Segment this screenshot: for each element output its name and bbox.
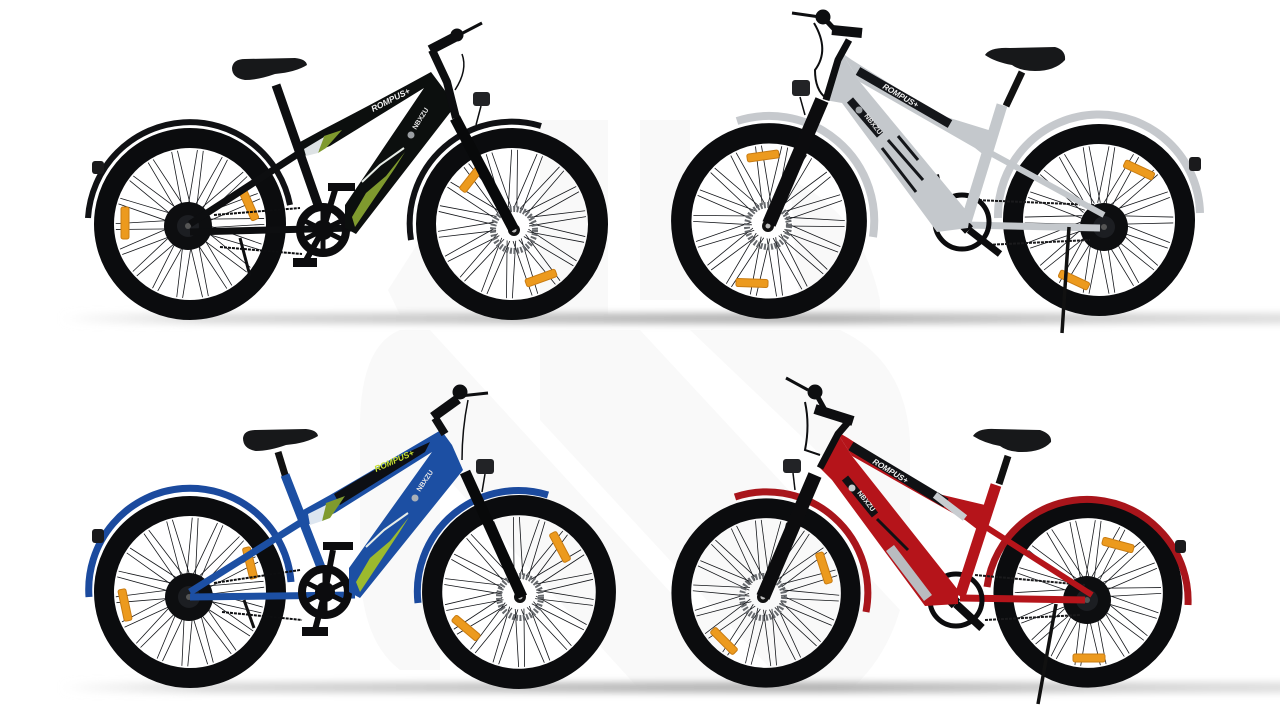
logo badge bbox=[856, 106, 862, 114]
reflectors bbox=[121, 163, 557, 287]
front wheel bbox=[380, 93, 644, 355]
frame graphics bbox=[845, 446, 965, 598]
fork bbox=[455, 118, 514, 230]
kickstand bbox=[1038, 604, 1056, 704]
seat post bbox=[1006, 72, 1022, 106]
reflectors bbox=[736, 150, 1155, 290]
bike: black bbox=[76, 23, 644, 355]
rear hub bbox=[1080, 203, 1128, 251]
ROMPUS label: ROMPUS+ bbox=[373, 447, 415, 474]
frame bbox=[300, 72, 452, 234]
tail light bbox=[92, 161, 104, 174]
frame graphics bbox=[850, 71, 950, 192]
ROMPUS label: ROMPUS+ bbox=[369, 86, 412, 114]
ground shadow bottom bbox=[60, 682, 1280, 693]
front disc brake bbox=[747, 205, 789, 247]
tail light bbox=[1175, 540, 1186, 553]
fork bbox=[465, 472, 522, 597]
chainring and pedals bbox=[293, 183, 355, 267]
NBXZU label: NBXZU bbox=[412, 107, 430, 131]
fenders bbox=[89, 488, 548, 603]
saddle bbox=[985, 47, 1065, 71]
fenders bbox=[88, 122, 541, 240]
headlamp bbox=[473, 92, 490, 106]
frame bbox=[820, 431, 985, 606]
tail light bbox=[92, 529, 104, 543]
background watermark bbox=[360, 120, 910, 690]
logo badge bbox=[408, 132, 414, 138]
ROMPUS label: ROMPUS+ bbox=[871, 457, 910, 485]
front disc brake bbox=[499, 576, 541, 618]
reflectors bbox=[118, 531, 571, 641]
kickstand bbox=[1062, 227, 1069, 333]
bike: red bbox=[645, 378, 1223, 720]
seat tube bbox=[966, 105, 1002, 222]
rear wheel bbox=[961, 82, 1237, 358]
rear hub bbox=[1063, 576, 1111, 624]
rear wheel bbox=[953, 458, 1223, 720]
chain and stays bbox=[965, 150, 1104, 245]
rear wheel bbox=[82, 484, 298, 700]
front wheel bbox=[390, 463, 648, 720]
ground shadow top bbox=[60, 313, 1280, 324]
chainring and pedal bbox=[934, 175, 1000, 254]
saddle bbox=[973, 429, 1051, 452]
chain and stays bbox=[190, 150, 352, 276]
chain and stays bbox=[960, 520, 1092, 620]
fenders bbox=[737, 114, 1200, 237]
frame graphics bbox=[308, 442, 430, 592]
logo badge bbox=[848, 484, 856, 492]
seat tube bbox=[276, 85, 318, 205]
logo badge bbox=[412, 494, 418, 502]
seat tube bbox=[285, 475, 322, 570]
reflectors bbox=[710, 537, 1134, 662]
fenders bbox=[735, 492, 1188, 612]
headlamp bbox=[792, 80, 810, 96]
ROMPUS label: ROMPUS+ bbox=[881, 82, 920, 110]
NBXZU label: NBXZU bbox=[855, 490, 876, 513]
front wheel bbox=[647, 99, 891, 343]
seat post bbox=[999, 456, 1008, 484]
front disc brake bbox=[493, 209, 535, 251]
headlamp bbox=[476, 459, 494, 474]
chain and stays bbox=[190, 523, 355, 628]
handlebar bbox=[792, 10, 862, 115]
seat tube bbox=[960, 485, 996, 596]
fork bbox=[769, 100, 822, 224]
front disc brake bbox=[742, 576, 784, 618]
frame bbox=[825, 53, 995, 232]
frame bbox=[303, 430, 463, 598]
seat post bbox=[278, 452, 286, 478]
tail light bbox=[1189, 157, 1201, 171]
handlebar bbox=[433, 385, 488, 492]
saddle bbox=[232, 58, 307, 80]
frame graphics bbox=[304, 130, 405, 227]
rear wheel bbox=[76, 110, 304, 338]
chainring and pedal bbox=[906, 567, 982, 628]
handlebar bbox=[786, 378, 853, 490]
chainring and pedals bbox=[302, 542, 353, 636]
rear hub bbox=[164, 202, 212, 250]
saddle bbox=[243, 429, 318, 451]
bike: silver bbox=[647, 10, 1237, 358]
rear hub bbox=[165, 573, 213, 621]
front wheel bbox=[645, 472, 887, 714]
fork bbox=[763, 475, 815, 597]
headlamp bbox=[783, 459, 801, 473]
NBXZU label: NBXZU bbox=[862, 113, 883, 136]
bike: blue bbox=[82, 385, 648, 720]
NBXZU label: NBXZU bbox=[416, 469, 435, 493]
handlebar bbox=[430, 23, 482, 125]
